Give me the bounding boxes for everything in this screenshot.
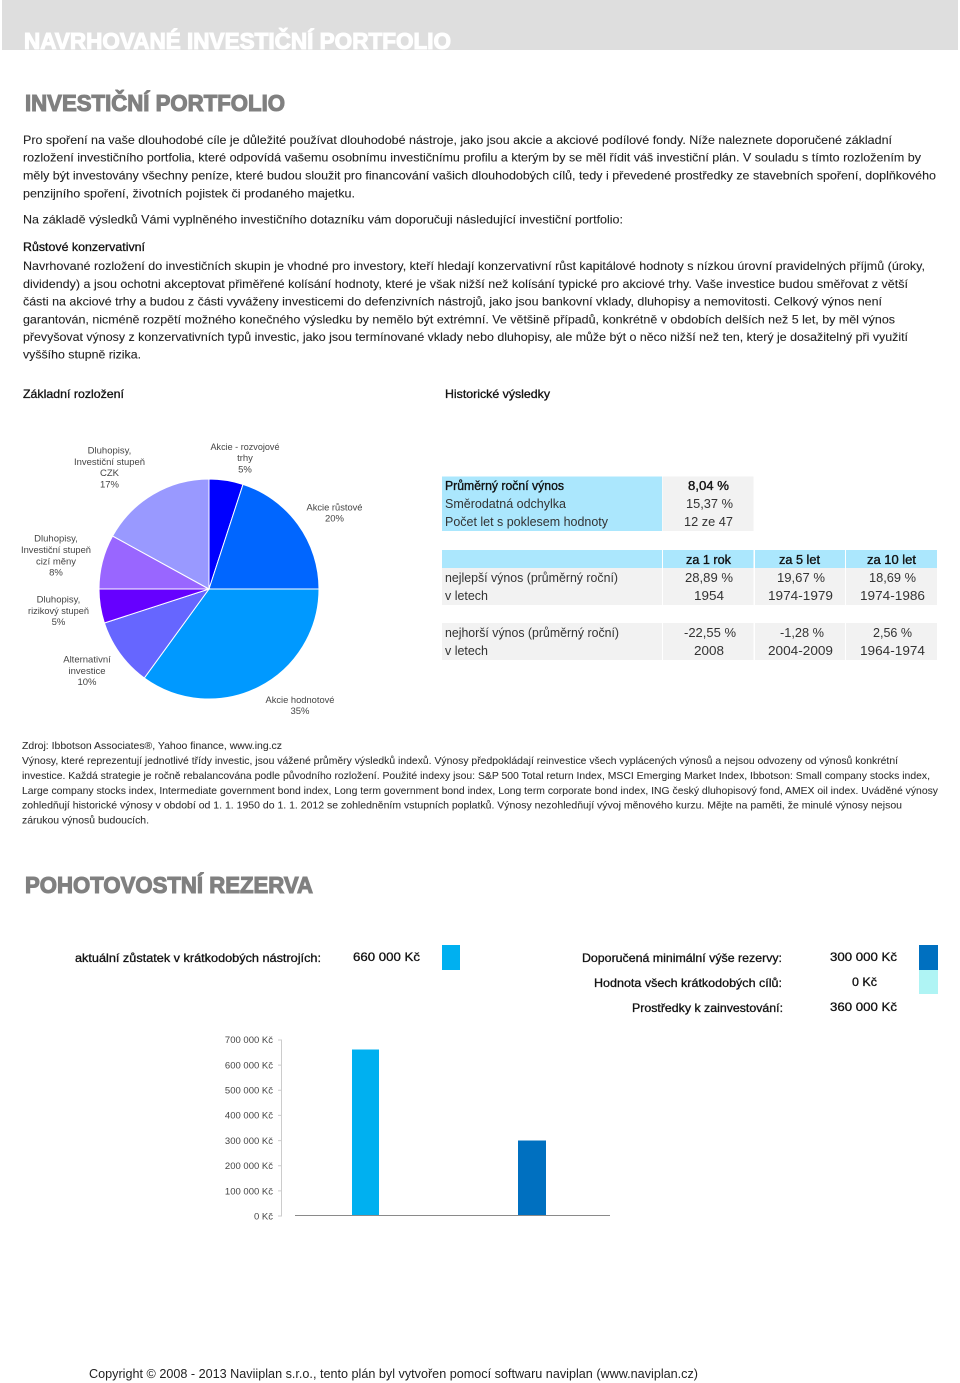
pie labels: Dluhopisy,: [88, 446, 131, 456]
intro paragraph: rozložení investičního portfolia, které odpovídá vašemu osobnímu investičnímu profilu a kterým by se měl řídit váš investiční plán. V souladu s tímto rozložením by: [23, 150, 921, 164]
pie labels: Akcie hodnotové: [266, 695, 334, 706]
recommendation sentence: Na základě výsledků Vámi vyplněného investičního dotazníku vám doporučuji následující investiční portfolio:: [23, 212, 623, 226]
table: best and worst returns: za 5 let: [779, 553, 821, 567]
table: best and worst returns: 2004-2009: [768, 644, 833, 658]
table: best and worst returns: 1974-1979: [768, 589, 833, 603]
pie labels: 35%: [290, 706, 310, 717]
reserve summary rows: [582, 945, 938, 1015]
reserve summary rows: 300 000 Kč: [830, 950, 897, 964]
subheading: historické výsledky: Historické výsledky: [445, 387, 550, 401]
pie labels: 5%: [238, 464, 252, 476]
table: summary statistics: Směrodatná odchylka: [445, 497, 566, 511]
table: best and worst returns: nejhorší výnos (průměrný roční): [445, 626, 619, 640]
table: summary statistics: 12 ze 47: [684, 515, 733, 529]
bar chart: reserve comparison: 700 000 Kč: [225, 1035, 273, 1046]
pie labels: Akcie růstové: [306, 502, 362, 514]
profile name: Růstové konzervativní: [23, 240, 146, 254]
table: summary statistics: Průměrný roční výnos: [445, 479, 564, 493]
current balance row: [75, 945, 460, 970]
bar chart: reserve comparison: [225, 1035, 610, 1222]
pie labels: [21, 442, 362, 717]
pie labels: rizikový stupeň: [28, 606, 89, 617]
pie labels: trhy: [237, 453, 253, 464]
bar chart: reserve comparison: 0 Kč: [254, 1212, 273, 1222]
pie labels: cizí měny: [36, 556, 76, 568]
reserve summary rows: Hodnota všech krátkodobých cílů:: [594, 976, 782, 990]
table: best and worst returns: v letech: [445, 589, 488, 603]
profile description: vyššího stupně rizika.: [23, 348, 141, 362]
table: best and worst returns: v letech: [445, 644, 488, 658]
table: best and worst returns: nejlepší výnos (průměrný roční): [445, 571, 618, 585]
pie labels: 5%: [52, 617, 66, 628]
heading: pohotovostní rezerva: POHOTOVOSTNÍ REZERVA: [25, 871, 313, 898]
table: summary statistics: 8,04 %: [688, 479, 729, 493]
profile description: [23, 259, 925, 362]
table: summary statistics: 15,37 %: [686, 497, 733, 511]
source and disclaimer notes: zohledňují historické výnosy v období od 1. 1. 1950 do 1. 1. 2012 se zohledněním vstupních poplatků. Výnosy nezohledňují vývoj měnového kurzu. Mějte na paměti, že minulé výnosy nejsou: [22, 800, 902, 812]
bar chart: reserve comparison: 300 000 Kč: [225, 1136, 273, 1147]
table: best and worst returns: 1964-1974: [860, 644, 925, 658]
bar chart: reserve comparison: 400 000 Kč: [225, 1110, 273, 1122]
intro paragraph: [23, 133, 936, 200]
bar chart: reserve comparison: 100 000 Kč: [225, 1186, 273, 1198]
current balance row: aktuální zůstatek v krátkodobých nástrojích:: [75, 951, 321, 965]
page header band: [2, 0, 958, 54]
table: best and worst returns: -22,55 %: [684, 626, 736, 640]
table: best and worst returns: 18,69 %: [869, 571, 916, 585]
pie labels: Investiční stupeň: [74, 457, 145, 468]
page header band: NAVRHOVANÉ INVESTIČNÍ PORTFOLIO: [24, 27, 451, 54]
table: best and worst returns: 1954: [694, 589, 724, 603]
profile description: Navrhované rozložení do investičních skupin je vhodné pro investory, kteří hledají konzervativní růst kapitálové hodnoty s nízkou úrovní pravidelných příjmů (úroky,: [23, 259, 925, 273]
source and disclaimer notes: Large company stocks index, Intermediate government bond index, Long term government bond index, Long term corporate bond index, ING český dluhopisový fond, AMEX oil index. Uváděné výnosy: [22, 785, 939, 797]
table: best and worst returns: 1974-1986: [860, 589, 925, 603]
heading: investiční portfolio: INVESTIČNÍ PORTFOLIO: [25, 89, 285, 116]
reserve summary rows: 360 000 Kč: [830, 1000, 897, 1014]
table: best and worst returns: 2008: [694, 644, 724, 658]
intro paragraph: Pro spoření na vaše dlouhodobé cíle je důležité používat dlouhodobé nástroje, jako jsou akcie a akciové podílové fondy. Níže naleznete doporučené základní: [23, 133, 893, 147]
table: best and worst returns: [442, 550, 937, 660]
bar chart: reserve comparison: 200 000 Kč: [225, 1161, 273, 1172]
table: best and worst returns: 2,56 %: [873, 626, 912, 640]
reserve summary rows: Prostředky k zainvestování:: [632, 1001, 783, 1015]
current balance row: 660 000 Kč: [353, 950, 420, 964]
source and disclaimer notes: Výnosy, které reprezentují jednotlivé třídy investic, jsou vážené průměry výsledků indexů. Výnosy předpokládají reinvestice všech vyplácených výnosů a nejsou odvozeny od výnosů konkrétní: [22, 755, 898, 767]
source and disclaimer notes: zárukou výnosů budoucích.: [22, 814, 149, 826]
pie labels: CZK: [100, 468, 120, 479]
pie chart: asset allocation: [99, 479, 319, 699]
profile description: garantován, nicméně rozpětí možného konečného výsledku by nemělo být extrémní. Ve většině případů, konkrétně v obdobích delších než 5 let, by měl výnos: [23, 312, 895, 326]
pie labels: 10%: [77, 677, 97, 688]
table: best and worst returns: 19,67 %: [777, 571, 825, 585]
profile description: převyšovat výnosy z konzervativních typů investic, jako jsou termínované vklady nebo dluhopisy, ale může být o něco nižší než ten, který je dosažitelný při využití: [23, 330, 909, 344]
reserve summary rows: Doporučená minimální výše rezervy:: [582, 951, 782, 965]
table: summary statistics: [442, 476, 754, 531]
profile description: dividendy) a jsou ochotni akceptovat přiměřené kolísání hodnoty, které je však nižší než kolísání typické pro akciové trhy. Vaše investice budou směřovat z větší: [23, 277, 909, 291]
table: best and worst returns: za 1 rok: [686, 553, 732, 567]
pie labels: Alternativní: [63, 654, 111, 666]
intro paragraph: měly být investovány všechny peníze, které budou sloužit pro financování vašich dlouhodobých cílů, tedy i převedené prostředky ze stavebních spoření, doplňkového: [23, 168, 936, 182]
pie labels: Dluhopisy,: [37, 594, 80, 606]
table: best and worst returns: -1,28 %: [780, 626, 824, 640]
reserve summary rows: 0 Kč: [852, 975, 877, 989]
pie labels: investice: [69, 666, 105, 677]
source and disclaimer notes: [22, 740, 939, 826]
bar chart: reserve comparison: 500 000 Kč: [225, 1086, 273, 1096]
source and disclaimer notes: investice. Každá strategie je ročně rebalancována podle původního rozložení. Použité indexy jsou: S&P 500 Total return Index, MSCI Emerging Market Index, Ibbotson: Small company stocks index,: [22, 770, 930, 782]
table: best and worst returns: 28,89 %: [685, 571, 733, 585]
pie labels: Investiční stupeň: [21, 545, 91, 556]
profile description: části na akciové trhy a budou z části vyváženy investicemi do defenzivních nástrojů, jako jsou bankovní vklady, dluhopisy a nemovitosti. Celkový výnos není: [23, 294, 883, 308]
table: best and worst returns: za 10 let: [867, 553, 917, 567]
footer copyright: Copyright © 2008 - 2013 Naviiplan s.r.o., tento plán byl vytvořen pomocí softwaru naviplan (www.naviplan.cz): [89, 1367, 698, 1381]
pie labels: Dluhopisy,: [34, 534, 78, 544]
source and disclaimer notes: Zdroj: Ibbotson Associates®, Yahoo finance, www.ing.cz: [22, 740, 282, 752]
pie labels: 20%: [325, 514, 345, 524]
pie labels: Akcie - rozvojové: [210, 442, 280, 453]
pie labels: 17%: [100, 480, 120, 490]
pie labels: 8%: [49, 568, 63, 578]
bar chart: reserve comparison: 600 000 Kč: [225, 1060, 273, 1072]
table: summary statistics: Počet let s poklesem hodnoty: [445, 515, 609, 529]
subheading: základní rozložení: Základní rozložení: [23, 387, 125, 401]
intro paragraph: penzijního spoření, životních pojistek či prodaného majetku.: [23, 186, 355, 200]
